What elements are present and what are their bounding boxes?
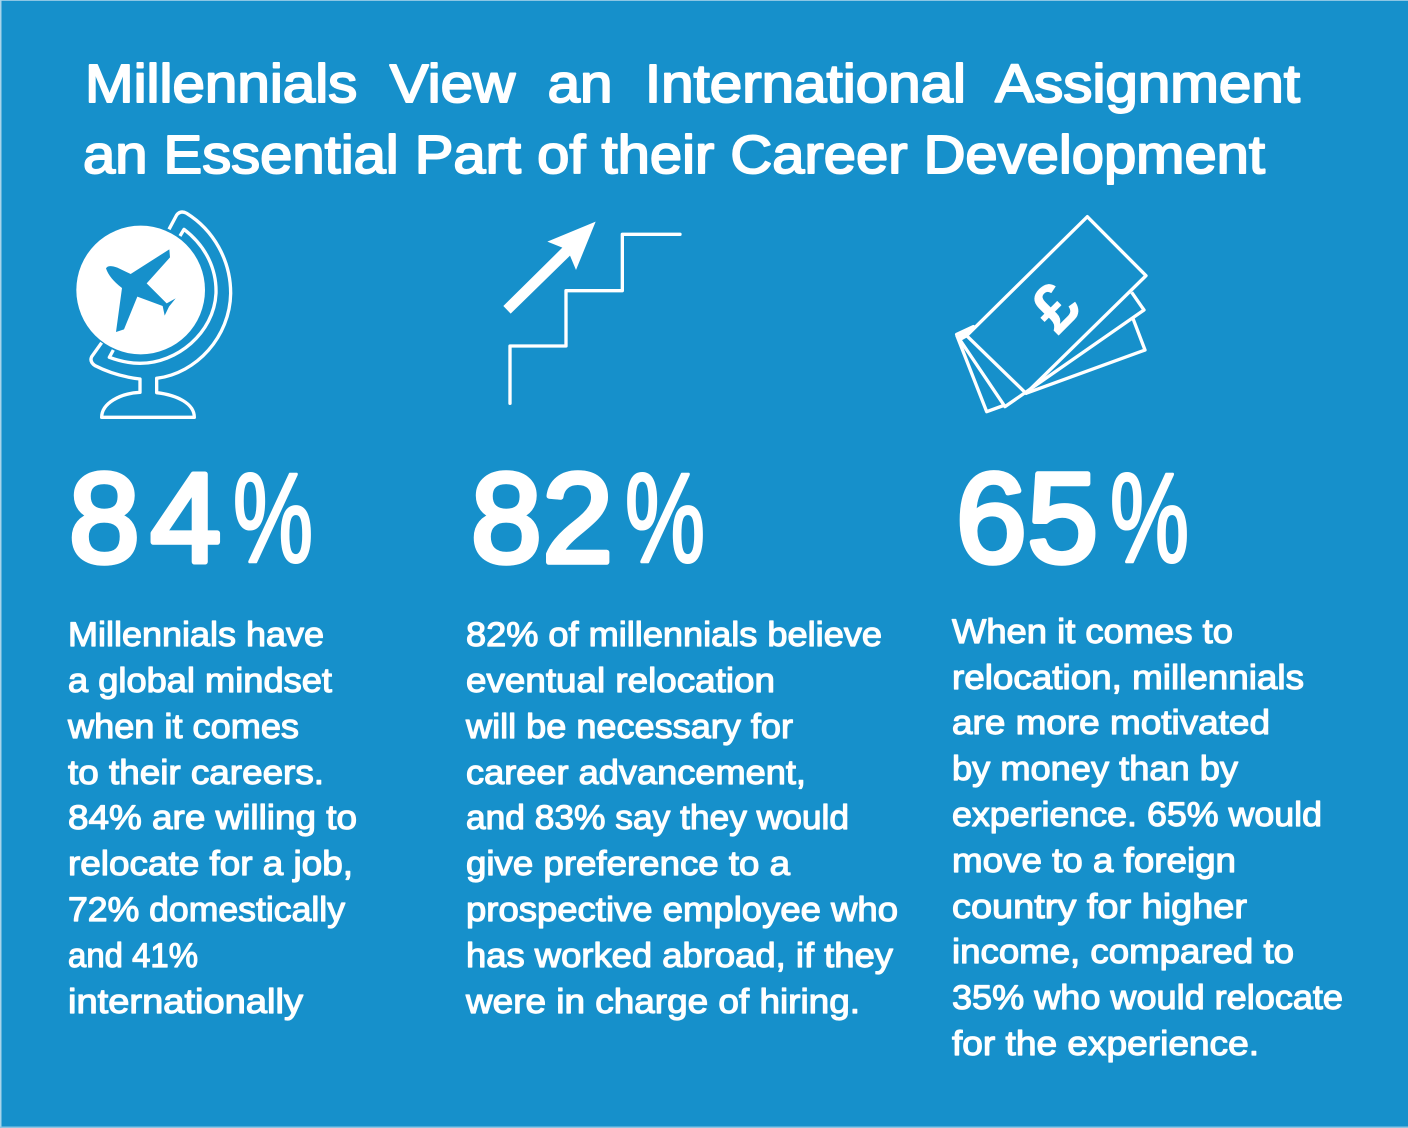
statistic: 84%: % xyxy=(233,447,313,589)
text block: column 1: 84% are willing to xyxy=(68,799,357,837)
icon: pound banknotes xyxy=(957,217,1146,412)
text block: column 2: has worked abroad, if they xyxy=(466,937,893,975)
text block: column 1: relocate for a job, xyxy=(68,845,353,883)
statistic: 65%: 65 xyxy=(956,447,1098,589)
statistic: 82%: % xyxy=(625,447,705,589)
text block: column 1: to their careers. xyxy=(68,754,324,792)
statistic: 65%: % xyxy=(1110,447,1189,589)
text block: column 1: Millennials have xyxy=(68,616,324,654)
text block: column 2: prospective employee who xyxy=(466,891,898,929)
statistic: 65% xyxy=(956,447,1189,589)
text block: column 1 xyxy=(67,616,357,1021)
statistic: 82% xyxy=(471,447,705,589)
text block: column 3: by money than by xyxy=(952,750,1238,788)
text block: column 3: are more motivated xyxy=(952,704,1270,742)
title: an Essential Part of their Career Development xyxy=(83,125,1265,185)
text block: column 3: experience. 65% would xyxy=(952,796,1322,834)
text block: column 3: 35% who would relocate xyxy=(952,979,1343,1017)
text block: column 2: were in charge of hiring. xyxy=(465,983,860,1021)
text block: column 2: give preference to a xyxy=(466,845,790,883)
text block: column 2 xyxy=(465,616,898,1021)
text block: column 1: 72% domestically xyxy=(68,891,345,929)
icon: globe with plane xyxy=(76,212,231,417)
text block: column 3: move to a foreign xyxy=(952,842,1236,880)
text block: column 3: income, compared to xyxy=(952,933,1294,971)
text block: column 1: internationally xyxy=(68,983,303,1021)
text block: column 3: When it comes to xyxy=(952,613,1233,651)
title: Millennials View an International Assignment xyxy=(85,54,1300,114)
text block: column 3: relocation, millennials xyxy=(952,659,1304,697)
text block: column 2: career advancement, xyxy=(466,754,806,792)
text block: column 3 xyxy=(952,613,1343,1063)
text block: column 3: country for higher xyxy=(952,888,1247,926)
text block: column 2: and 83% say they would xyxy=(466,799,849,837)
icon: stairs with arrow xyxy=(503,222,680,403)
text block: column 2: 82% of millennials believe xyxy=(466,616,882,654)
statistic: 84%: 84 xyxy=(69,447,221,589)
statistic: 84% xyxy=(69,447,313,589)
text block: column 3: for the experience. xyxy=(952,1025,1259,1063)
text block: column 1: a global mindset xyxy=(68,662,333,700)
text block: column 2: eventual relocation xyxy=(466,662,775,700)
text block: column 2: will be necessary for xyxy=(465,708,793,746)
icon: pound banknotes: £ xyxy=(1015,267,1094,346)
title xyxy=(83,54,1300,185)
statistic: 82%: 82 xyxy=(471,447,613,589)
text block: column 1: when it comes xyxy=(67,708,299,746)
text block: column 1: and 41% xyxy=(68,937,198,975)
